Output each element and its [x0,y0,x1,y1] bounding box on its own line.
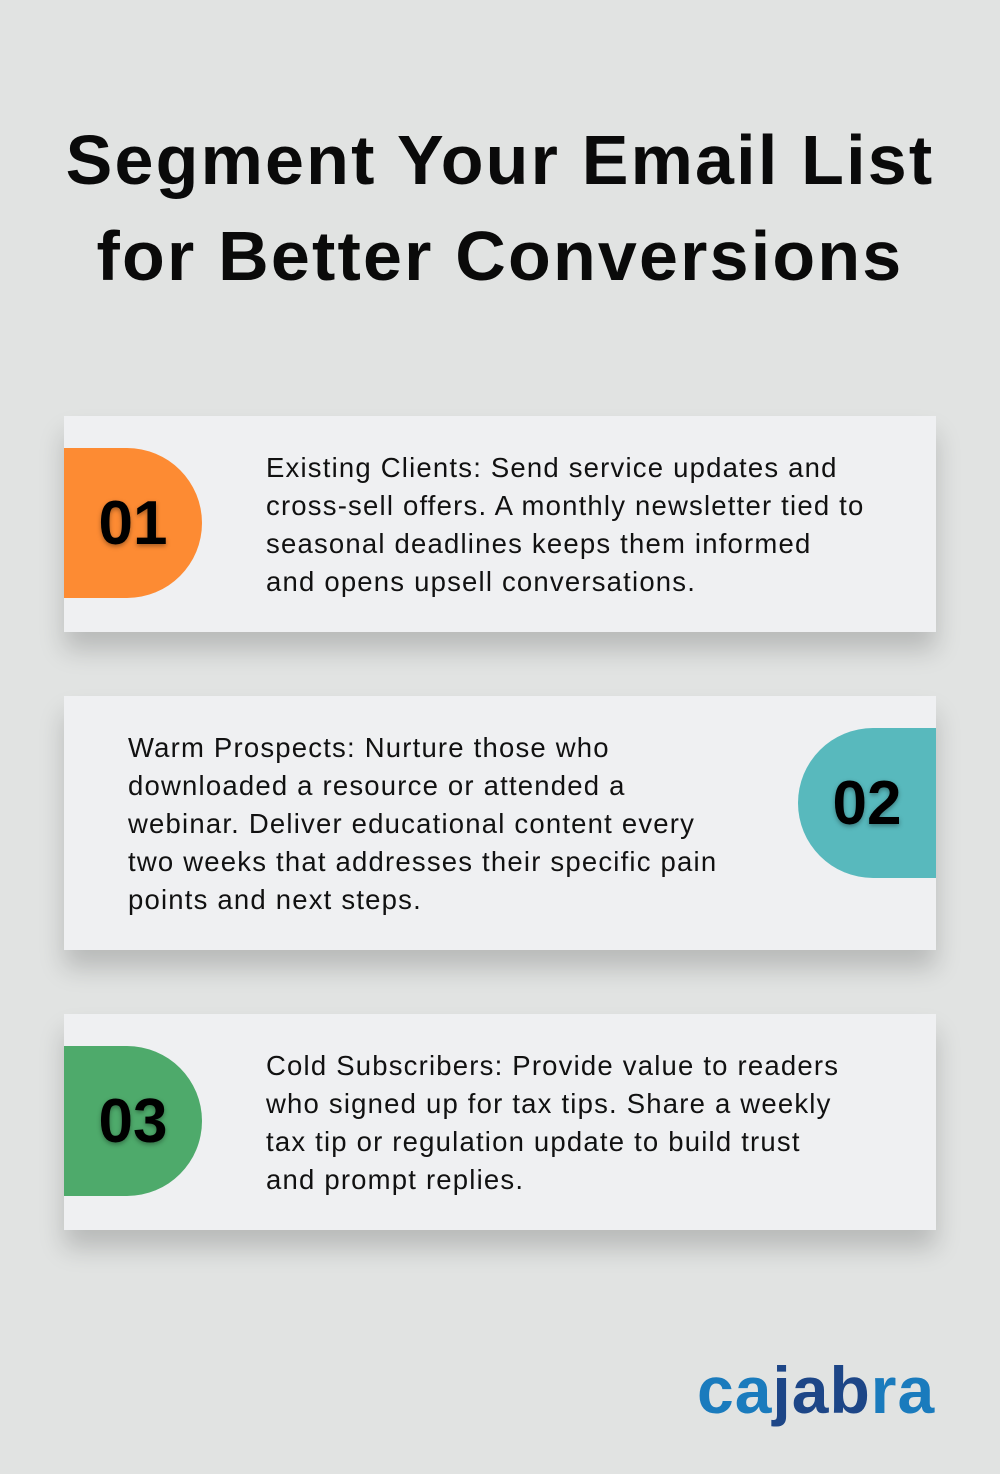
title [66,121,934,295]
text: existing clients [266,452,864,597]
text: warm prospects: Warm Prospects: Nurture those who [128,732,610,763]
badge 03: 03 [99,1086,167,1156]
panel: warm prospects [64,696,936,950]
text: existing clients: and opens upsell conversations. [266,566,696,597]
badge 01: 01 [99,488,167,558]
text: cold subscribers: who signed up for tax tips. Share a weekly [266,1088,832,1119]
badge 02 [798,728,936,878]
text: warm prospects: webinar. Deliver educational content every [128,808,695,839]
text: existing clients: cross-sell offers. A monthly newsletter tied to [266,490,864,521]
badge 01 [64,448,202,598]
text: warm prospects: two weeks that addresses their specific pain [128,846,717,877]
text: warm prospects: points and next steps. [128,884,422,915]
text: existing clients: seasonal deadlines keeps them informed [266,528,812,559]
badge 02: 02 [833,768,901,838]
panel: existing clients [64,416,936,632]
badge 03 [64,1046,202,1196]
panel: cold subscribers [64,1014,936,1230]
text: existing clients: Existing Clients: Send service updates and [266,452,838,483]
title: for Better Conversions [97,217,903,295]
text: cold subscribers: Cold Subscribers: Provide value to readers [266,1050,839,1081]
logo: cajabra [697,1353,935,1427]
text: warm prospects [128,732,717,915]
text: cold subscribers: tax tip or regulation update to build trust [266,1126,801,1157]
text: cold subscribers [266,1050,839,1195]
text: cold subscribers: and prompt replies. [266,1164,524,1195]
text: warm prospects: downloaded a resource or attended a [128,770,626,801]
title: Segment Your Email List [66,121,934,199]
